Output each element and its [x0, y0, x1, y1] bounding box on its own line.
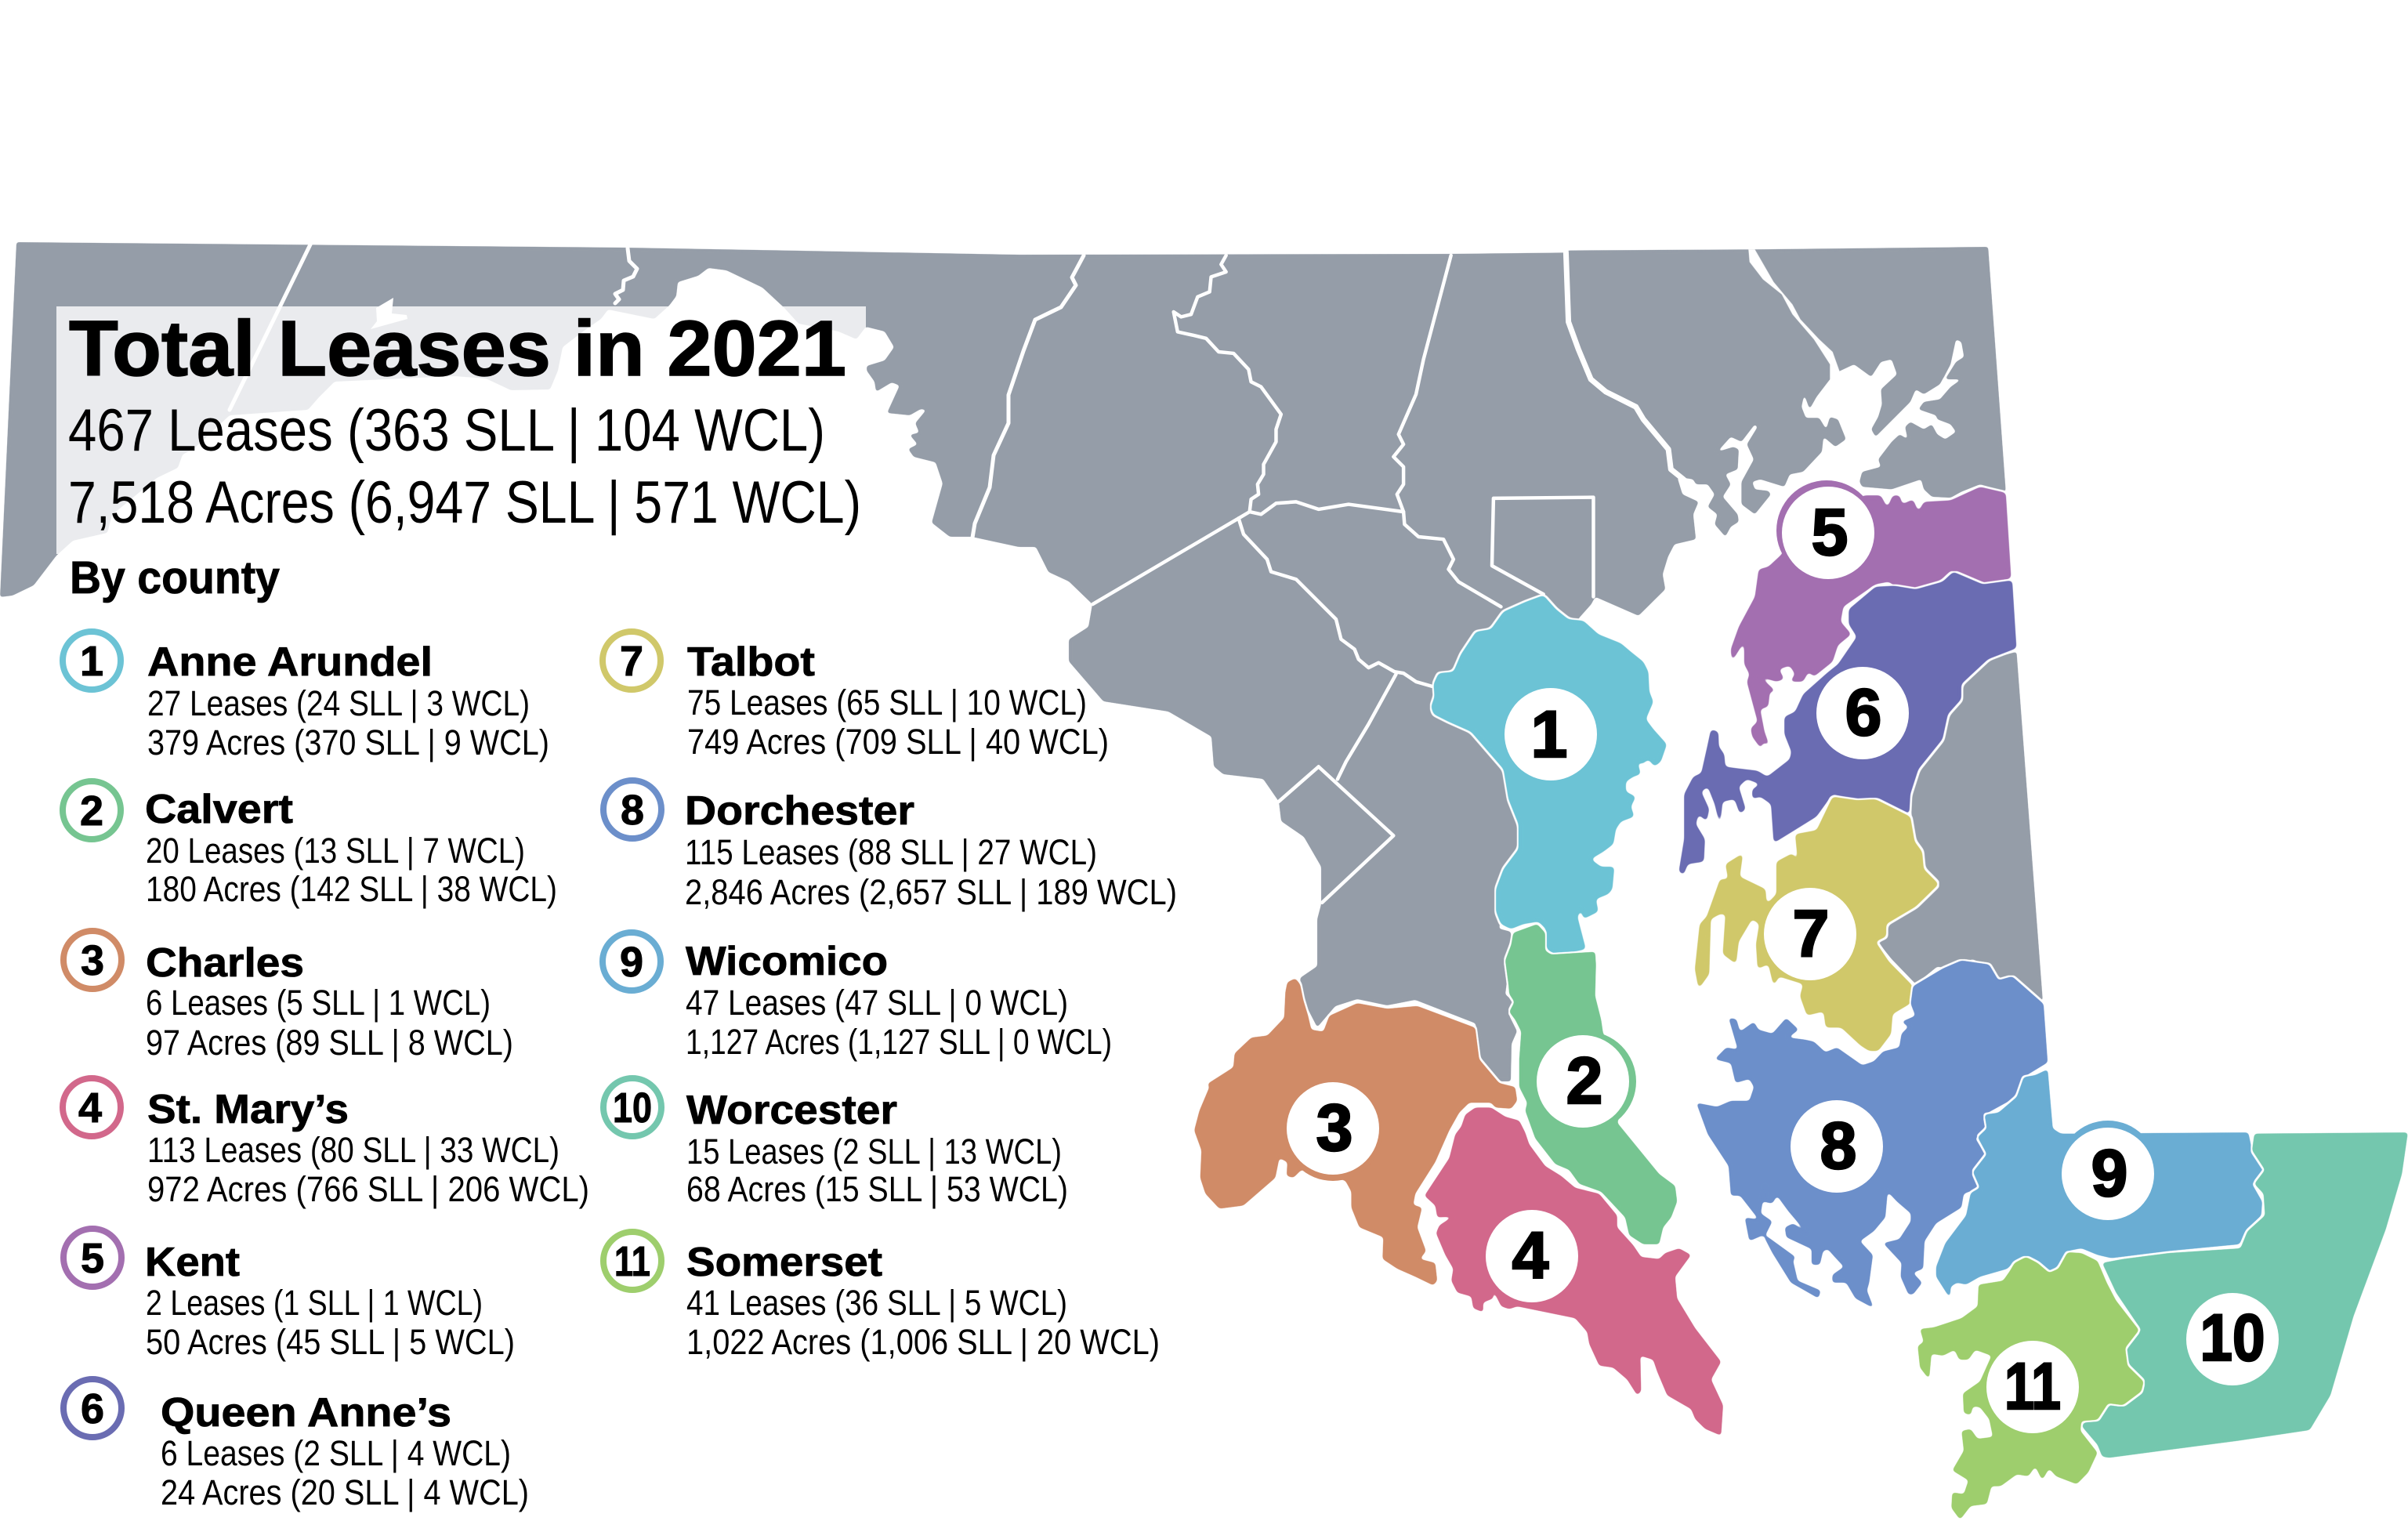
- legend: Queen Anne's: 24 Acres (20 SLL | 4 WCL): [161, 1472, 529, 1512]
- county: Calvert: [1505, 924, 1677, 1244]
- legend: Talbot: [603, 632, 1109, 762]
- legend: Dorchester: 8: [621, 787, 644, 834]
- legend: Talbot: Talbot: [687, 639, 815, 685]
- legend: St. Mary's: 972 Acres (766 SLL | 206 WCL): [147, 1169, 589, 1209]
- map marker 3: 3: [1316, 1091, 1352, 1164]
- legend: Dorchester: 2,846 Acres (2,657 SLL | 189 WCL): [685, 872, 1177, 912]
- legend: Kent: 2 Leases (1 SLL | 1 WCL): [146, 1283, 483, 1323]
- legend: Charles: 97 Acres (89 SLL | 8 WCL): [146, 1023, 513, 1063]
- map marker 4: 4: [1512, 1219, 1549, 1292]
- legend: Kent: [63, 1229, 515, 1362]
- county: Anne Arundel: [1431, 596, 1667, 954]
- legend: Queen Anne's: 6: [81, 1385, 104, 1432]
- county lines on gray map: [230, 243, 1841, 903]
- legend: Charles: 6 Leases (5 SLL | 1 WCL): [146, 983, 491, 1023]
- legend: Dorchester: 115 Leases (88 SLL | 27 WCL): [685, 832, 1097, 872]
- county: Wicomico: [1936, 1069, 2264, 1298]
- legend: Wicomico: [603, 933, 1112, 1062]
- map marker 6: 6: [1845, 675, 1881, 749]
- legend: Talbot: 749 Acres (709 SLL | 40 WCL): [687, 722, 1109, 762]
- county: Kent: [1731, 487, 2011, 749]
- legend: St. Mary's: 113 Leases (80 SLL | 33 WCL): [147, 1130, 559, 1170]
- legend: Calvert: Calvert: [145, 787, 293, 832]
- Baltimore, Harford and Cecil counties: [1567, 247, 2006, 619]
- county: Somerset: [1917, 1252, 2144, 1520]
- legend: Charles: Charles: [146, 940, 304, 986]
- title background panel: [56, 306, 866, 554]
- legend: Kent: Kent: [145, 1240, 240, 1285]
- legend: Somerset: 41 Leases (36 SLL | 5 WCL): [686, 1283, 1067, 1323]
- map marker 11: [1986, 1341, 2079, 1433]
- legend: Anne Arundel: 1: [80, 638, 103, 685]
- legend: St. Mary's: 4: [78, 1085, 102, 1132]
- map marker 7: 7: [1793, 896, 1829, 970]
- legend: Talbot: 7: [620, 638, 643, 685]
- map marker 3: [1284, 1082, 1382, 1181]
- map marker 7: [1764, 888, 1856, 980]
- legend: Worcester: 15 Leases (2 SLL | 13 WCL): [686, 1132, 1062, 1172]
- Caroline county: [1875, 652, 2043, 1001]
- legend: Charles: [63, 931, 513, 1063]
- total acres line: 7,518 Acres (6,947 SLL | 571 WCL): [68, 469, 861, 536]
- legend: Calvert: 180 Acres (142 SLL | 38 WCL): [146, 869, 557, 909]
- county: Worcester: [2082, 1132, 2408, 1458]
- map marker 6: [1816, 667, 1909, 759]
- legend: Charles: 3: [81, 937, 104, 984]
- map marker 2: 2: [1566, 1044, 1602, 1117]
- western and central counties: [0, 242, 1596, 1081]
- map marker 2: [1536, 1031, 1636, 1132]
- legend: Somerset: [603, 1232, 1160, 1362]
- county: Dorchester: [1696, 961, 2048, 1309]
- map marker 8: 8: [1820, 1109, 1856, 1182]
- legend: Queen Anne's: 6 Leases (2 SLL | 4 WCL): [161, 1433, 511, 1473]
- legend: Wicomico: 1,127 Acres (1,127 SLL | 0 WCL): [686, 1022, 1112, 1062]
- legend: Somerset: Somerset: [686, 1240, 882, 1285]
- county: Charles: [1194, 978, 1517, 1285]
- legend: Anne Arundel: Anne Arundel: [147, 639, 433, 685]
- legend: Worcester: Worcester: [686, 1088, 897, 1133]
- water inlet under title: [371, 298, 407, 329]
- county: Talbot: [1695, 797, 1939, 1051]
- map marker 10: [2186, 1293, 2279, 1385]
- legend: Dorchester: Dorchester: [685, 788, 914, 834]
- legend: Kent: 50 Acres (45 SLL | 5 WCL): [146, 1322, 515, 1362]
- legend: Worcester: [603, 1078, 1068, 1209]
- legend: Worcester: 68 Acres (15 SLL | 53 WCL): [686, 1169, 1068, 1209]
- map marker 5: 5: [1812, 495, 1848, 569]
- legend: Wicomico: 47 Leases (47 SLL | 0 WCL): [686, 983, 1068, 1023]
- map: non-featured Maryland counties in gray: [0, 242, 2043, 1081]
- legend: Somerset: 11: [614, 1238, 650, 1285]
- legend: Kent: 5: [81, 1235, 104, 1282]
- total leases line: 467 Leases (363 SLL | 104 WCL): [68, 397, 825, 464]
- legend: Anne Arundel: 27 Leases (24 SLL | 3 WCL): [147, 683, 530, 723]
- map marker 11: 11: [2004, 1349, 2061, 1423]
- legend: Queen Anne's: Queen Anne’s: [161, 1390, 451, 1436]
- title: Total Leases in 2021: [69, 305, 846, 393]
- legend: Anne Arundel: [63, 632, 549, 762]
- legend: Calvert: [63, 781, 557, 909]
- by county heading: By county: [70, 552, 280, 603]
- map marker 1: [1505, 688, 1597, 780]
- county: St. Mary's: [1425, 1107, 1723, 1436]
- map marker 10: 10: [2200, 1301, 2265, 1374]
- legend: St. Mary's: St. Mary’s: [147, 1087, 349, 1132]
- legend: Anne Arundel: 379 Acres (370 SLL | 9 WCL): [147, 722, 549, 762]
- map marker 9: 9: [2091, 1136, 2127, 1210]
- county: Queen Anne's: [1678, 572, 2016, 875]
- legend: Dorchester: [603, 780, 1177, 912]
- map marker 8: [1791, 1100, 1883, 1193]
- legend: Wicomico: 9: [620, 939, 643, 986]
- legend: Worcester: 10: [613, 1085, 652, 1132]
- map marker 4: [1486, 1210, 1578, 1302]
- legend: Queen Anne's: [63, 1379, 529, 1512]
- legend: Somerset: 1,022 Acres (1,006 SLL | 20 WCL): [686, 1322, 1160, 1362]
- map marker 1: 1: [1531, 697, 1567, 771]
- legend: St. Mary's: [63, 1078, 589, 1209]
- legend: Calvert: 2: [80, 788, 103, 835]
- legend: Calvert: 20 Leases (13 SLL | 7 WCL): [146, 831, 525, 871]
- legend: Talbot: 75 Leases (65 SLL | 10 WCL): [687, 683, 1087, 722]
- map marker 5: [1776, 480, 1877, 581]
- legend: Wicomico: Wicomico: [686, 939, 888, 984]
- map marker 9: [2059, 1121, 2157, 1220]
